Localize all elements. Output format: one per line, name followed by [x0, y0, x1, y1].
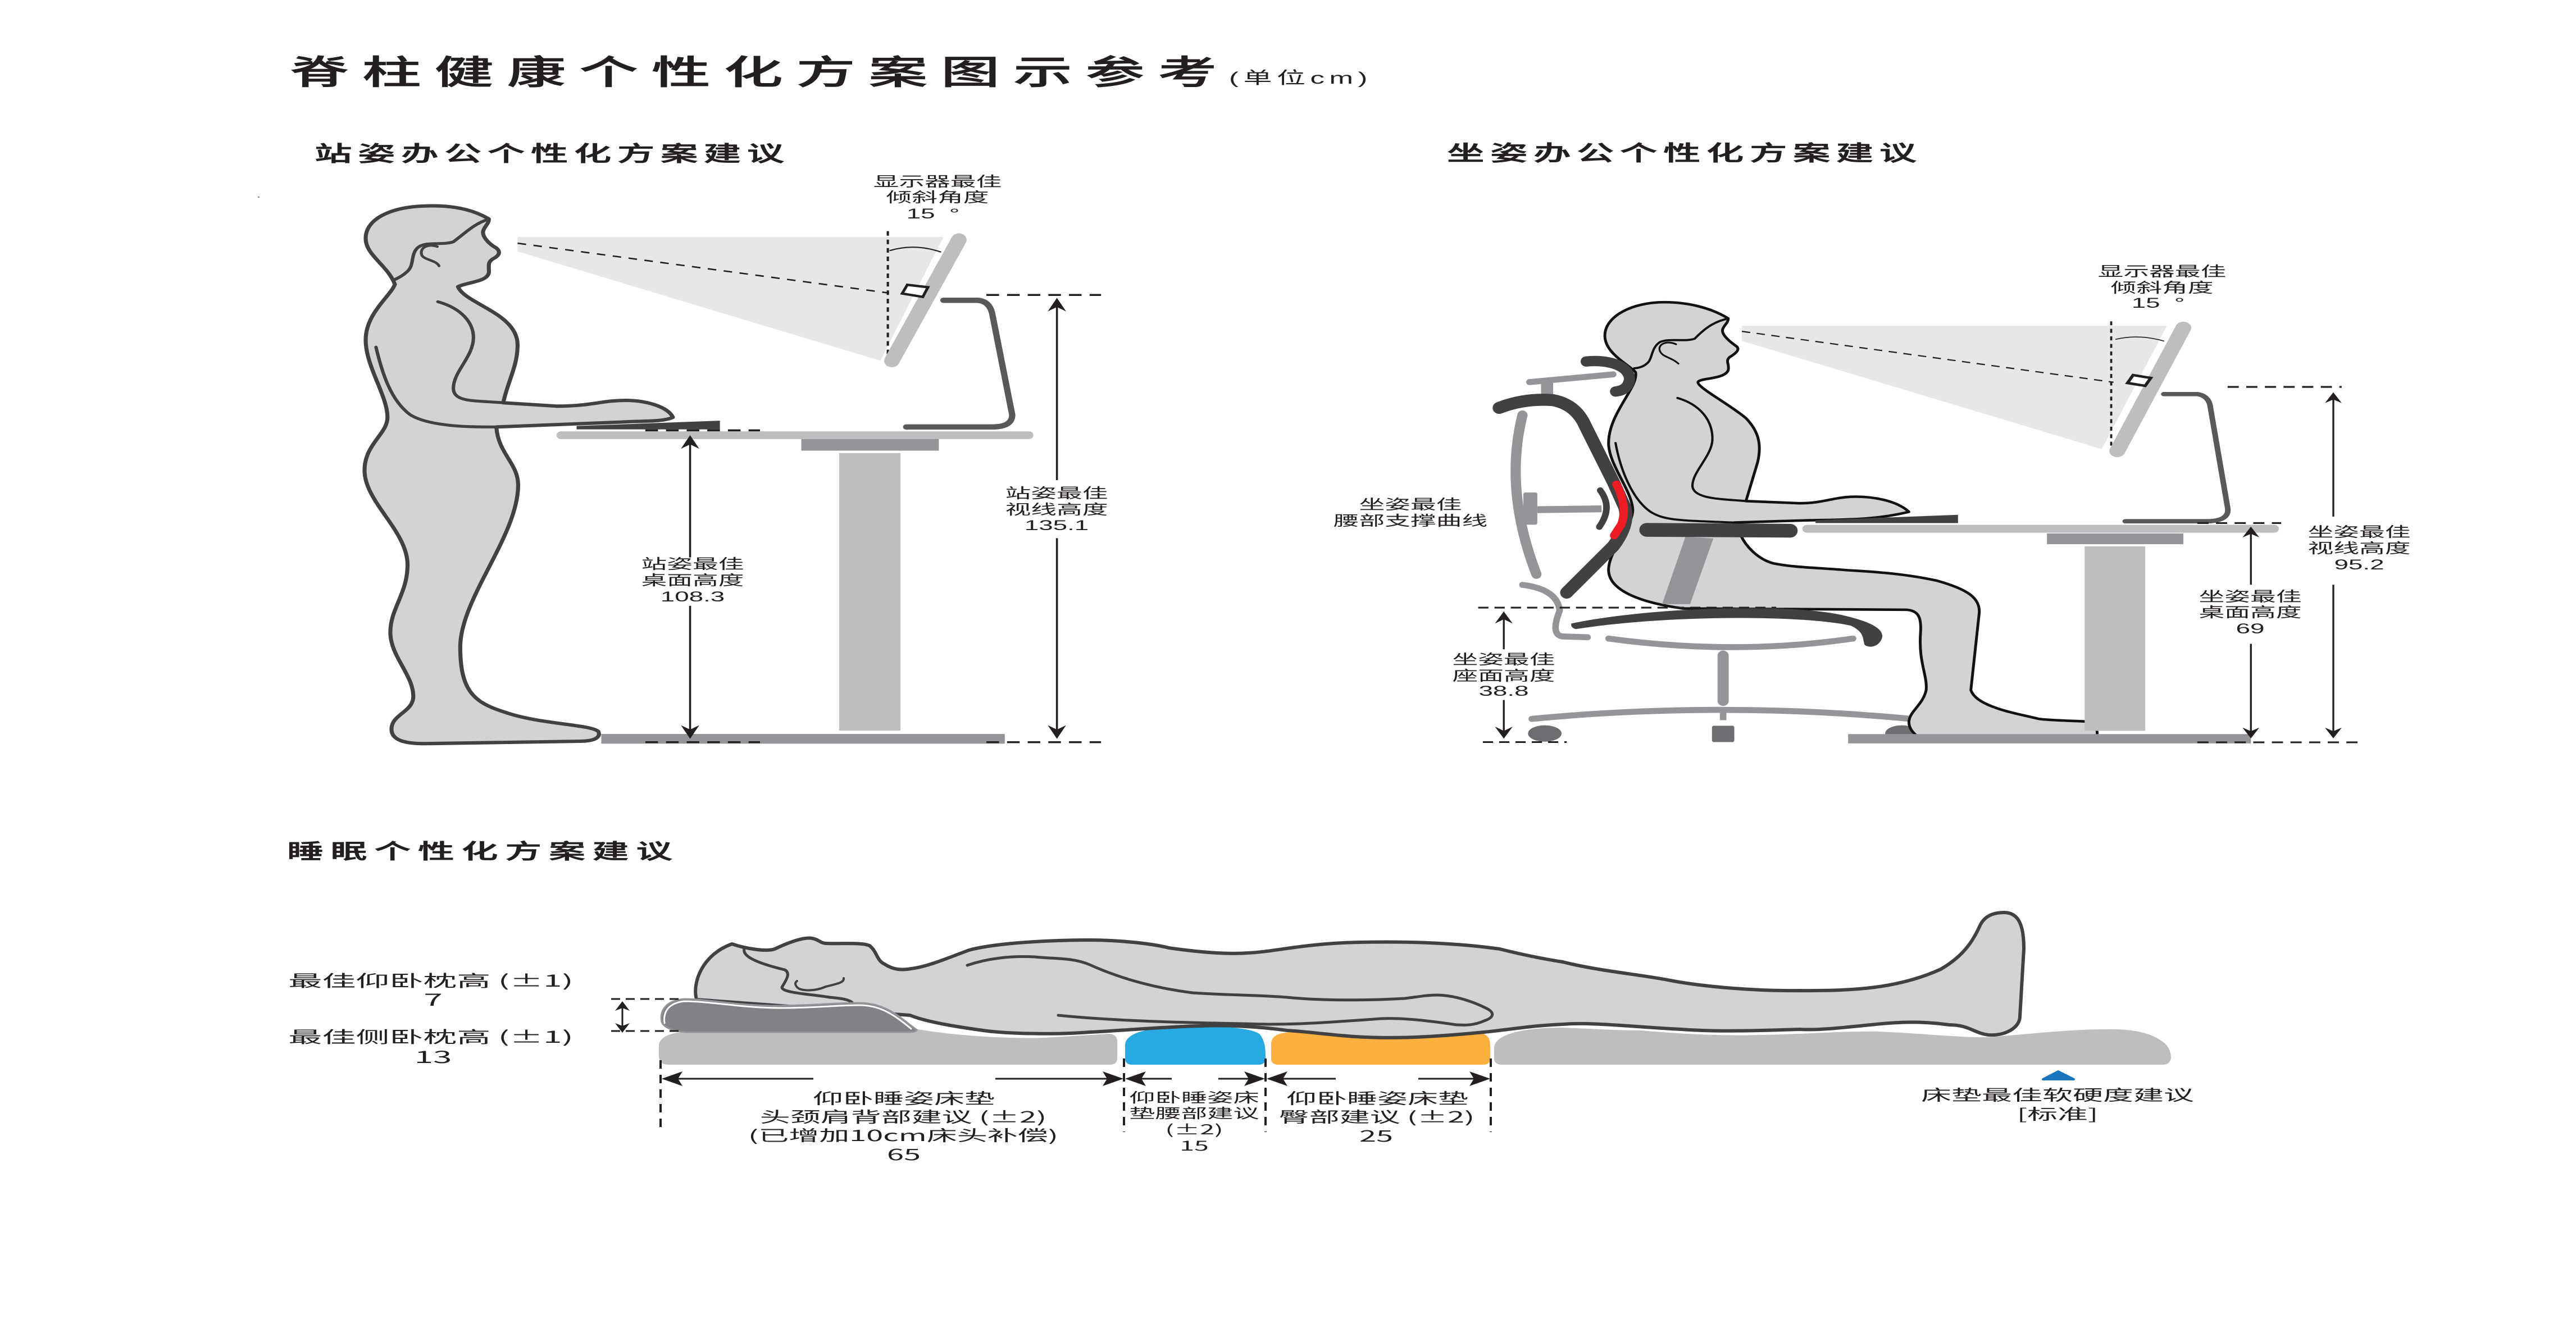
label: seated monitor tilt: 显示器最佳 [2098, 264, 2226, 279]
label: seated monitor tilt [2098, 264, 2226, 311]
label: standing sight height: 135.1 [1025, 518, 1089, 533]
label: seat height: 38.8 [1478, 683, 1529, 699]
chair rear frame [1515, 375, 1911, 720]
mattress: hip section [1271, 1032, 1490, 1065]
label: hip zone: 仰卧睡姿床垫 [1286, 1087, 1468, 1108]
label: standing monitor tilt: 15 ° [907, 206, 959, 221]
label: mattress firmness: 床垫最佳软硬度建议 [1921, 1083, 2194, 1105]
label: seated monitor tilt: 倾斜角度 [2111, 280, 2213, 295]
sight lines [517, 231, 940, 364]
label: lumbar curve [1333, 497, 1487, 528]
label: lumbar zone [1129, 1087, 1259, 1155]
heading: sleep: 睡眠个性化方案建议 [287, 840, 680, 863]
mattress: head and back section [659, 1029, 1117, 1065]
label: lumbar curve: 腰部支撑曲线 [1333, 513, 1487, 528]
mattress: leg section [1494, 1028, 2171, 1065]
arrow: seated sight height [2325, 393, 2342, 738]
label: standing sight height [1005, 486, 1108, 533]
label: seat height: 坐姿最佳 [1453, 652, 1555, 667]
standing desk [557, 431, 1034, 743]
standing figure [365, 206, 673, 743]
right-angle mark [902, 285, 928, 297]
label: hip zone [1279, 1087, 1474, 1146]
chair dark parts [1499, 361, 1882, 647]
arrow: sight height [1048, 298, 1066, 739]
title: 脊柱健康个性化方案图示参考 [290, 54, 1230, 92]
red lumbar curve [1614, 484, 1624, 536]
label: standing desk height: 108.3 [661, 589, 725, 604]
arrow: desk height [681, 435, 699, 739]
label: seated sight height: 视线高度 [2308, 541, 2410, 556]
label: mattress firmness: [标准] [2017, 1102, 2098, 1124]
label: seated sight height: 坐姿最佳 [2308, 524, 2410, 540]
monitor [892, 240, 959, 361]
pillow height guides and arrow [611, 999, 684, 1033]
panel: seated desk and monitor [1742, 321, 2365, 743]
seated figure [1605, 302, 2097, 737]
label: seated sight height [2308, 524, 2410, 572]
view cone [517, 237, 944, 361]
keyboard [1815, 515, 1958, 523]
label: standing desk height: 站姿最佳 [641, 556, 744, 572]
label: standing desk height: 桌面高度 [641, 573, 744, 588]
panel: standing office diagram [365, 206, 1101, 743]
label: pillow heights [288, 968, 574, 1068]
heading: standing office: 站姿办公个性化方案建议 [315, 142, 790, 166]
label: standing desk height [641, 556, 744, 604]
chair casters [1528, 726, 1919, 742]
label: head and back zone: (已增加10cm床头补偿) [748, 1124, 1058, 1146]
monitor [2117, 328, 2183, 451]
label: lumbar zone: (±2) [1165, 1119, 1223, 1138]
dimension guide lines [2197, 387, 2365, 742]
monitor stand [2125, 394, 2228, 521]
label: seated desk height: 桌面高度 [2199, 605, 2301, 620]
label: standing sight height: 站姿最佳 [1005, 486, 1108, 501]
title: (单位cm) [1229, 69, 1372, 87]
label: mattress firmness [1921, 1083, 2194, 1124]
label: pillow heights: 最佳侧卧枕高 (±1) [288, 1024, 574, 1048]
label: standing monitor tilt [873, 174, 1002, 221]
label: lumbar curve: 坐姿最佳 [1359, 497, 1462, 512]
label: pillow heights: 最佳仰卧枕高 (±1) [288, 968, 574, 992]
mattress: lumbar section [1125, 1027, 1266, 1065]
label: standing monitor tilt: 显示器最佳 [873, 174, 1002, 189]
keyboard [577, 421, 720, 430]
label: lumbar zone: 仰卧睡姿床 [1129, 1087, 1259, 1106]
panel: sleep diagram [611, 913, 2171, 1132]
label: hip zone: 25 [1359, 1124, 1393, 1146]
label: seated desk height: 坐姿最佳 [2199, 589, 2301, 604]
arrow: seated desk height [2242, 527, 2259, 738]
sight lines [1742, 321, 2164, 454]
label: head and back zone: 65 [887, 1143, 921, 1165]
view cone [1742, 326, 2167, 449]
label: seat height [1453, 652, 1555, 699]
label: seat height: 座面高度 [1453, 668, 1555, 683]
label: seated sight height: 95.2 [2334, 557, 2384, 572]
monitor stand [906, 300, 1012, 427]
label: seated monitor tilt: 15 ° [2132, 295, 2184, 311]
mattress zone guides and arrows [661, 1059, 1491, 1132]
seated desk [1803, 525, 2279, 743]
dimension guide lines [645, 295, 1101, 742]
heading: seated office: 坐姿办公个性化方案建议 [1447, 142, 1923, 165]
label: head and back zone: 头颈肩背部建议 (±2) [760, 1105, 1046, 1127]
label: head and back zone: 仰卧睡姿床垫 [813, 1087, 995, 1108]
label: standing monitor tilt: 倾斜角度 [886, 190, 989, 205]
label: standing sight height: 视线高度 [1005, 502, 1108, 517]
label: lumbar zone: 垫腰部建议 [1129, 1102, 1259, 1122]
panel: seated office diagram [1478, 302, 2167, 742]
label: lumbar zone: 15 [1180, 1135, 1209, 1155]
icon: firmness marker [2043, 1071, 2074, 1079]
label: seated desk height: 69 [2236, 621, 2264, 636]
label: pillow heights: 13 [415, 1044, 452, 1068]
chair arm support [1662, 537, 1713, 604]
right-angle mark [2128, 375, 2151, 386]
pillow [661, 999, 917, 1032]
label: head and back zone [748, 1087, 1058, 1165]
label: seated desk height [2199, 589, 2301, 636]
label: hip zone: 臀部建议 (±2) [1279, 1105, 1474, 1127]
label: pillow heights: 7 [424, 987, 443, 1011]
lying figure [695, 913, 2024, 1038]
seat height guide and arrow [1478, 608, 1776, 742]
